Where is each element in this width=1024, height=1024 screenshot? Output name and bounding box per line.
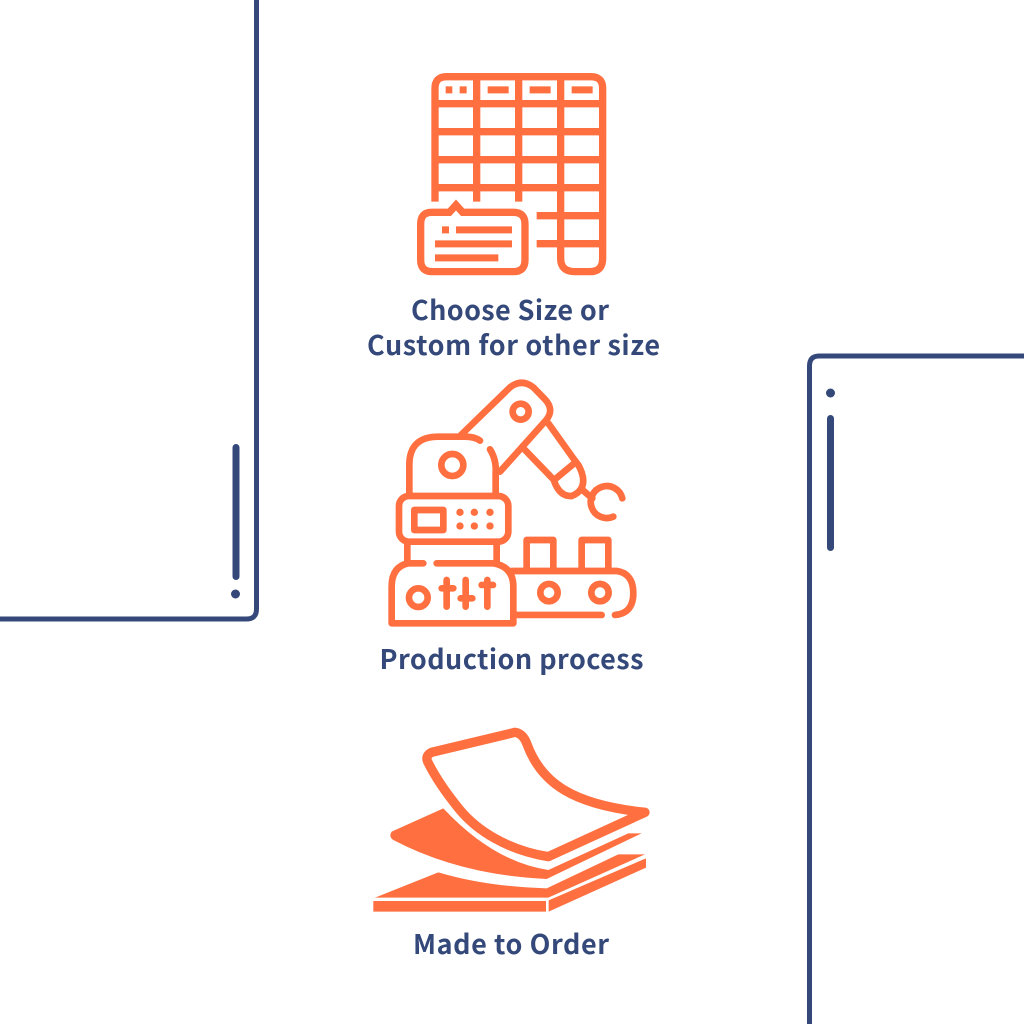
left frame: [0, 0, 256, 619]
label: choose size: [367, 289, 660, 363]
icon: paper stack: [373, 732, 646, 912]
icon: robot arm production line: [392, 383, 633, 623]
icon: size table: [421, 77, 603, 272]
label: choose size: Choose Size or: [411, 289, 609, 328]
label: choose size: Custom for other size: [367, 324, 660, 363]
right frame: [810, 356, 1024, 1024]
label: made to order: Made to Order: [413, 923, 609, 962]
label: production process: Production process: [380, 638, 644, 677]
